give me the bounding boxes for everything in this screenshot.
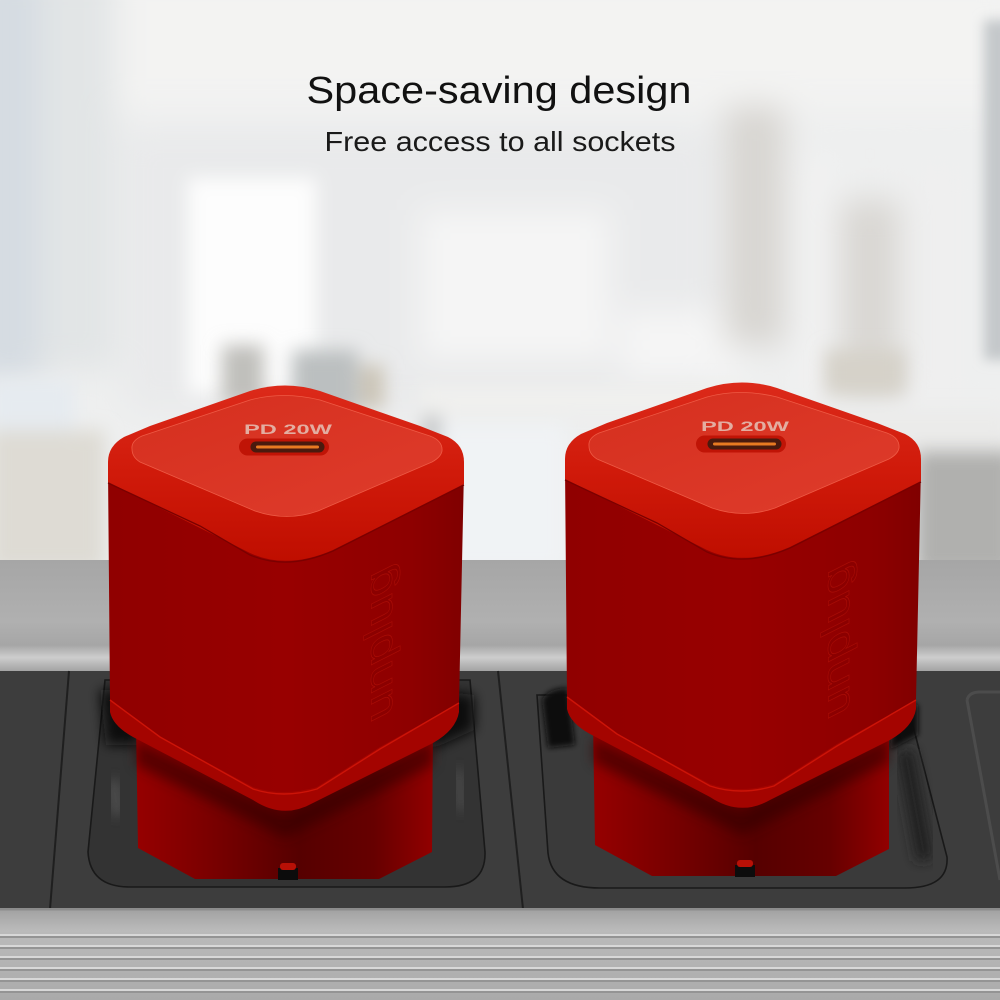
title: Space-saving design bbox=[306, 70, 692, 112]
charger right: brand mark: unplug bbox=[814, 554, 858, 729]
charger left: brand mark: unplug bbox=[357, 557, 401, 732]
charger right: band highlight bbox=[567, 697, 916, 791]
charger right: USB-C port bbox=[696, 436, 786, 452]
charger left bbox=[108, 386, 464, 880]
charger right: shadow under body bbox=[593, 737, 889, 835]
charger right bbox=[565, 382, 921, 877]
charger right: notch bbox=[735, 860, 755, 877]
charger left: band highlight bbox=[110, 700, 459, 794]
charger right: lid bbox=[565, 382, 921, 558]
charger left: top plate bbox=[132, 396, 442, 516]
socket recess right bbox=[537, 688, 947, 888]
charger right: lower band bbox=[567, 693, 916, 808]
charger right: body bbox=[565, 467, 921, 789]
power strip: dark socket panel bbox=[0, 671, 1000, 909]
charger left: PD 20W label: PD 20W bbox=[244, 422, 332, 437]
power strip: upper silver rail bbox=[0, 560, 1000, 672]
charger left: body bbox=[108, 470, 464, 792]
power strip: lower silver rail bbox=[0, 908, 1000, 1000]
charger left: lid seam bbox=[108, 483, 464, 562]
subtitle: Free access to all sockets bbox=[324, 126, 676, 157]
charger left: plug base bbox=[136, 725, 433, 879]
charger left: shadow under body bbox=[136, 740, 433, 838]
background: blurred interior room bbox=[0, 0, 1000, 575]
charger right: plug base bbox=[593, 722, 889, 876]
charger right: top plate bbox=[589, 392, 899, 514]
charger left: USB-C port bbox=[239, 438, 329, 456]
charger left: lid bbox=[108, 386, 464, 561]
socket recess left bbox=[88, 680, 485, 887]
charger left: lower band bbox=[110, 696, 459, 811]
charger right: lid seam bbox=[565, 480, 921, 559]
charger left: notch bbox=[278, 863, 298, 880]
charger right: PD 20W label: PD 20W bbox=[701, 419, 789, 434]
